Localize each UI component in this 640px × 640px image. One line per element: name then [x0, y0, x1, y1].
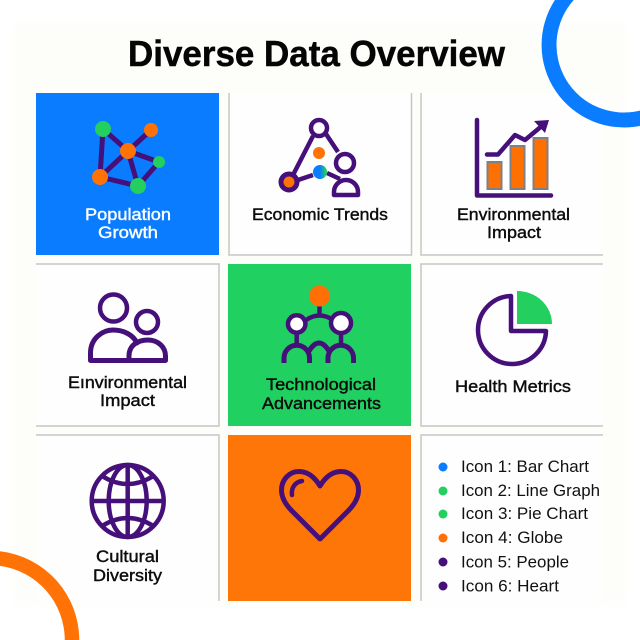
icon: bar and line chart [477, 120, 551, 196]
label: population growth [85, 206, 171, 242]
decorative ring: blue top right [542, 0, 640, 127]
label: cultural diversity [93, 548, 163, 585]
legend item: icon 6: Icon 6: Heart [461, 578, 559, 596]
label: cultural diversity: Cultural [96, 548, 159, 566]
label: environmental impact [457, 206, 570, 242]
icon: pie chart [478, 291, 552, 364]
panel: legend [421, 435, 603, 601]
label: environmental impact: Impact [487, 224, 541, 242]
label: health metrics: Health Metrics [455, 378, 571, 396]
panel: health metrics [421, 264, 603, 426]
icon: network nodes [92, 121, 165, 194]
icon: heart [282, 472, 358, 539]
label: population growth: Growth [98, 224, 158, 242]
label: cultural diversity: Diversity [93, 567, 163, 585]
legend item: icon 4: Icon 4: Globe [461, 529, 563, 547]
decorative ring: orange bottom left [0, 551, 79, 640]
label: technological advancements: Technological [266, 376, 376, 394]
panel: cultural diversity [36, 435, 219, 601]
label: technological advancements [262, 376, 381, 413]
icon: globe [92, 465, 164, 537]
label: population growth: Population [85, 206, 171, 224]
icon: connected team [284, 286, 354, 363]
panel: environmental impact top [421, 93, 603, 255]
panel: environmental impact people [36, 264, 219, 426]
legend item: icon 5: Icon 5: People [461, 554, 569, 572]
legend item: icon 3: Icon 3: Pie Chart [461, 505, 588, 523]
icon: network with person [281, 120, 358, 195]
label: technological advancements: Advancements [262, 395, 381, 413]
label: economic trends: Economic Trends [252, 206, 388, 224]
panel: heart [228, 435, 411, 601]
title: Diverse Data Overview [128, 33, 506, 74]
panel: technological advancements [228, 264, 411, 426]
icon: two people [90, 294, 166, 360]
label: environmental impact: Eınvironmental [68, 374, 187, 392]
legend item: icon 1: Icon 1: Bar Chart [461, 458, 589, 476]
label: environmental impact: Impact [100, 392, 155, 410]
label: environmental impact [68, 374, 187, 410]
panel: population growth [36, 93, 219, 255]
panel: economic trends [229, 93, 412, 255]
label: environmental impact: Environmental [457, 206, 570, 224]
legend item: icon 2: Icon 2: Line Graph [461, 482, 600, 500]
